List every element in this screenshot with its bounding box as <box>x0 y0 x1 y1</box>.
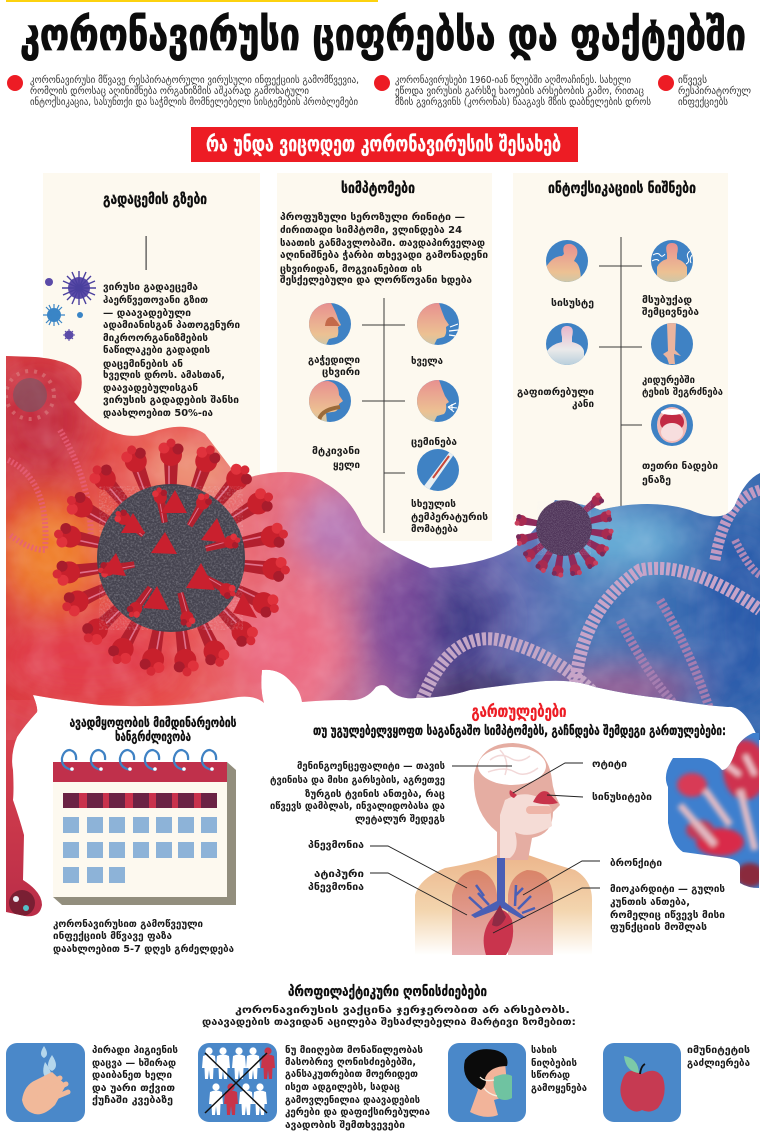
icon: chills <box>651 240 693 282</box>
label: pale skin: კანი <box>572 399 594 410</box>
label: weakness: სისუსტე <box>551 298 594 309</box>
label: sneeze: ცემინება <box>411 437 457 448</box>
icon: aching limbs <box>651 323 693 365</box>
text: transmission body: ხველის დროს. ამასთან, <box>103 370 225 381</box>
diagram: human body <box>415 743 592 955</box>
heading: complications: გართულებები <box>472 702 566 722</box>
text: mask use <box>531 1045 587 1094</box>
text: immunity: გაძლიერება <box>687 1058 750 1069</box>
heading: prevention: პროფილაქტიკური ღონისძიებები <box>288 984 487 1000</box>
small virus right <box>514 492 614 578</box>
label: otitis: ოტიტი <box>592 759 627 770</box>
label: meningoencephalitis: ტვინისა და მისი გარსების, აგრეთვე <box>270 775 445 786</box>
red banner heading <box>191 127 578 162</box>
heading: intoxication: ინტოქსიკაციის ნიშნები <box>548 179 696 197</box>
label: stuffy nose: გაჭედილი <box>308 355 360 366</box>
text: transmission body: დაახლოებით 50%-ია <box>103 408 213 419</box>
label: aching limbs <box>642 375 723 398</box>
icon: weakness <box>546 240 588 282</box>
panel: transmission routes <box>43 173 260 493</box>
label: chills: შემცივნება <box>642 307 699 318</box>
label: fever: ტემპერატურის <box>411 512 488 523</box>
text: mask use: სახის <box>531 1045 557 1056</box>
icon: apple <box>603 1043 681 1122</box>
label: white tongue <box>642 461 718 486</box>
label: myocarditis <box>610 884 725 933</box>
text: transmission body: ადამიანისგან პათოგენური <box>103 320 240 331</box>
text: symptoms body: საათის განმავლობაში. თავდაპირველად <box>280 238 485 249</box>
text: avoid gatherings: გამოვლენილია დაავადების <box>285 1095 420 1106</box>
label: myocarditis: მიოკარდიტი — გულის <box>610 884 725 895</box>
faint virus top left <box>6 371 54 419</box>
panel: symptoms <box>277 173 492 541</box>
label: chills <box>642 295 699 318</box>
text: transmission body: ჰაერწვეთოვანი გზით <box>103 295 208 306</box>
text: hygiene: პირადი ჰიგიენის <box>92 1045 178 1056</box>
text: avoid gatherings: კერები და დაფიქსირებულია <box>285 1107 430 1118</box>
text: symptoms body: ცხვირიდან, მოგვიანებით ის <box>280 264 422 275</box>
text: prevention intro <box>202 1005 576 1028</box>
icon: avoid crowds <box>198 1043 277 1122</box>
label: sore throat <box>312 446 360 471</box>
intro block 3: ინფექციებს <box>678 97 728 108</box>
main coronavirus <box>51 438 291 678</box>
text: hygiene: და უარი თქვით <box>92 1083 175 1094</box>
tiny virus bottom left <box>9 890 35 916</box>
panel: signs of intoxication <box>513 173 728 520</box>
text: transmission body: ნაწილაკები გადადის <box>103 345 210 356</box>
intro block 2 <box>374 75 651 108</box>
label: aching limbs: ტეხის შეგრძნება <box>642 387 723 398</box>
central virus and DNA artwork <box>0 340 777 925</box>
label: meningoencephalitis <box>270 761 445 825</box>
text: avoid gatherings <box>285 1045 430 1131</box>
icon: pale skin <box>546 323 588 365</box>
label: chills: მსუბუქად <box>642 295 692 306</box>
text: mild phase duration: დაახლოებით 5-7 დღეს გრძელდება <box>53 944 234 955</box>
text: immunity <box>687 1045 750 1069</box>
label: myocarditis: ფუნქციის მოშლას <box>610 922 707 933</box>
heading: transmission: გადაცემის გზები <box>103 190 207 208</box>
text: symptoms body: შესქელებული და ლორწოვანი ხდება <box>280 275 472 286</box>
label: meningoencephalitis: მენინგოენცეფალიტი — თავის <box>297 761 445 772</box>
label: white tongue: თეთრი ნადები <box>642 461 718 472</box>
heading: recovery timeline: ხანგრძლივობა <box>115 729 191 745</box>
text: transmission body: — დაავადებული <box>103 308 191 319</box>
label: atypical pneumonia: ატიპური <box>314 869 364 880</box>
text: mild phase duration: ინფექციის მწვავე ფაზა <box>53 931 172 942</box>
text: symptoms body <box>280 212 488 286</box>
text: symptoms body: აღინიშნება ჭარბი თხევადი გამონადენი <box>280 250 488 261</box>
text: avoid gatherings: ავადობის შემთხვევები <box>285 1120 405 1131</box>
text: immunity: იმუნიტეტის <box>687 1045 750 1056</box>
icon: cough <box>417 303 459 345</box>
label: meningoencephalitis: ზურგის ტვინის ანთება, რაც <box>305 789 445 800</box>
DNA helix right <box>422 490 760 710</box>
text: mild phase duration <box>53 919 234 955</box>
red banner heading: რა უნდა ვიცოდეთ კორონავირუსის შესახებ <box>206 132 561 156</box>
label: fever <box>411 499 488 535</box>
right lower artwork fragment <box>666 733 759 888</box>
text: symptoms body: ძირითადი სიმპტომი, ვლინდება 24 <box>280 225 462 236</box>
label: pale skin: გაფითრებული <box>517 387 594 398</box>
label: meningoencephalitis: იწვევს დამბლას, ინვალიდობასა და <box>270 801 445 812</box>
label: sinusitis: სინუსიტები <box>592 792 652 803</box>
text: hygiene: დაიბანეთ ხელი <box>92 1070 172 1081</box>
faint DNA left <box>8 430 91 550</box>
icon: virus particles <box>43 271 96 341</box>
label: pale skin <box>517 387 594 410</box>
icon: hand washing <box>6 1043 85 1122</box>
label: sore throat: ყელი <box>333 460 360 471</box>
icon: white-coated tongue <box>651 404 693 446</box>
text: prevention intro: კორონავირუსის ვაქცინა ჯერჯერობით არ არსებობს. <box>235 1005 570 1016</box>
text: mild phase duration: კორონავირუსით გამოწვეული <box>53 919 203 930</box>
icon: sore throat <box>309 380 351 422</box>
text: avoid gatherings: ისეთ ადგილებს, სადაც <box>285 1082 400 1093</box>
text: hygiene: დაცვა — ხშირად <box>92 1058 176 1069</box>
heading: recovery timeline: ავადმყოფობის მიმდინარეობის <box>70 715 237 731</box>
intro block 2: მზის გვირგვინს (კორონას) წააგავს მზის დაბნელების დროს <box>395 97 651 108</box>
text: avoid gatherings: ნუ მიიღებთ მონაწილეობას <box>285 1045 423 1056</box>
text: mask use: ნიღბების <box>531 1058 577 1069</box>
icon: sneeze <box>417 380 459 422</box>
intro block 1: რომლის დროსაც აღინიშნება ორგანიზმის აშკარად გამოხატული <box>30 86 309 97</box>
intro block 1 <box>7 75 359 108</box>
text: transmission body: ვირუსი გადაეცემა <box>103 282 198 293</box>
icon: thermometer <box>417 449 459 491</box>
text: mask use: სწორად <box>531 1070 570 1081</box>
text: transmission body: მიკროორგანიზმების <box>103 333 208 344</box>
text: hygiene: ქუჩაში კვებაზე <box>92 1095 173 1106</box>
text: mask use: გამოყენება <box>531 1083 587 1094</box>
label: atypical pneumonia: პნევმონია <box>308 882 364 893</box>
label: bronchitis: ბრონქიტი <box>610 858 662 869</box>
heading: recovery timeline <box>70 715 237 745</box>
text: hygiene <box>92 1045 178 1106</box>
yellow top bar <box>6 0 378 2</box>
intro block 3: იწვევს <box>678 75 707 86</box>
text: avoid gatherings: განსაკუთრებით მოერიდეთ <box>285 1069 418 1080</box>
label: aching limbs: კიდურებში <box>642 375 695 386</box>
heading: symptoms: სიმპტომები <box>341 179 415 197</box>
text: transmission body: დაავადებულისგან <box>103 383 198 394</box>
icon: calendar <box>53 750 236 905</box>
icon: stuffy nose <box>309 303 351 345</box>
label: sore throat: მტკივანი <box>312 446 360 457</box>
intro block 1: ინტოქსიკაცია, სასუნთქი და საჭმლის მომნელებელი სისტემების პრობლემები <box>30 97 358 108</box>
text: prevention intro: დაავადების თავიდან აცილება შესაძლებელია მარტივი ზომებით: <box>202 1017 576 1028</box>
label: meningoencephalitis: ლეტალურ შედეგს <box>355 814 445 825</box>
label: fever: მომატება <box>411 524 458 535</box>
label: pneumonia: პნევმონია <box>308 840 364 851</box>
label: stuffy nose: ცხვირი <box>322 367 360 378</box>
label: myocarditis: კუნთის ანთება, <box>610 897 690 908</box>
text: transmission body: დაცემინების ან <box>103 359 183 370</box>
label: atypical pneumonia <box>308 869 364 893</box>
text: transmission body: ვირუსის გადადების შანსი <box>103 395 239 406</box>
intro block 1: კორონავირუსი მწვავე რესპირატორული ვირუსული ინფექციის გამომწვევია, <box>30 75 359 86</box>
intro block 2: ეწოდა ვირუსის გარსზე ხაოების არსებობის გამო, რითაც <box>395 86 645 97</box>
intro block 2: კორონავირუსები 1960-იან წლებში აღმოაჩინეს. სახელი <box>395 75 631 86</box>
text: avoid gatherings: მასობრივ ღონისძიებებში, <box>285 1057 416 1068</box>
intro block 3 <box>658 75 751 108</box>
label: myocarditis: რომელიც იწვევს მისი <box>610 910 725 921</box>
intro block 3: რესპირატორულ <box>678 86 751 97</box>
label: cough: ხველა <box>411 356 443 367</box>
icon: face mask <box>448 1043 526 1122</box>
leader lines <box>370 763 600 933</box>
label: white tongue: ენაზე <box>642 475 671 486</box>
label: stuffy nose <box>308 355 360 378</box>
label: fever: სხეულის <box>411 499 456 510</box>
text: transmission body <box>103 282 240 419</box>
text: symptoms body: პროფუზული სეროზული რინიტი — <box>280 212 465 223</box>
